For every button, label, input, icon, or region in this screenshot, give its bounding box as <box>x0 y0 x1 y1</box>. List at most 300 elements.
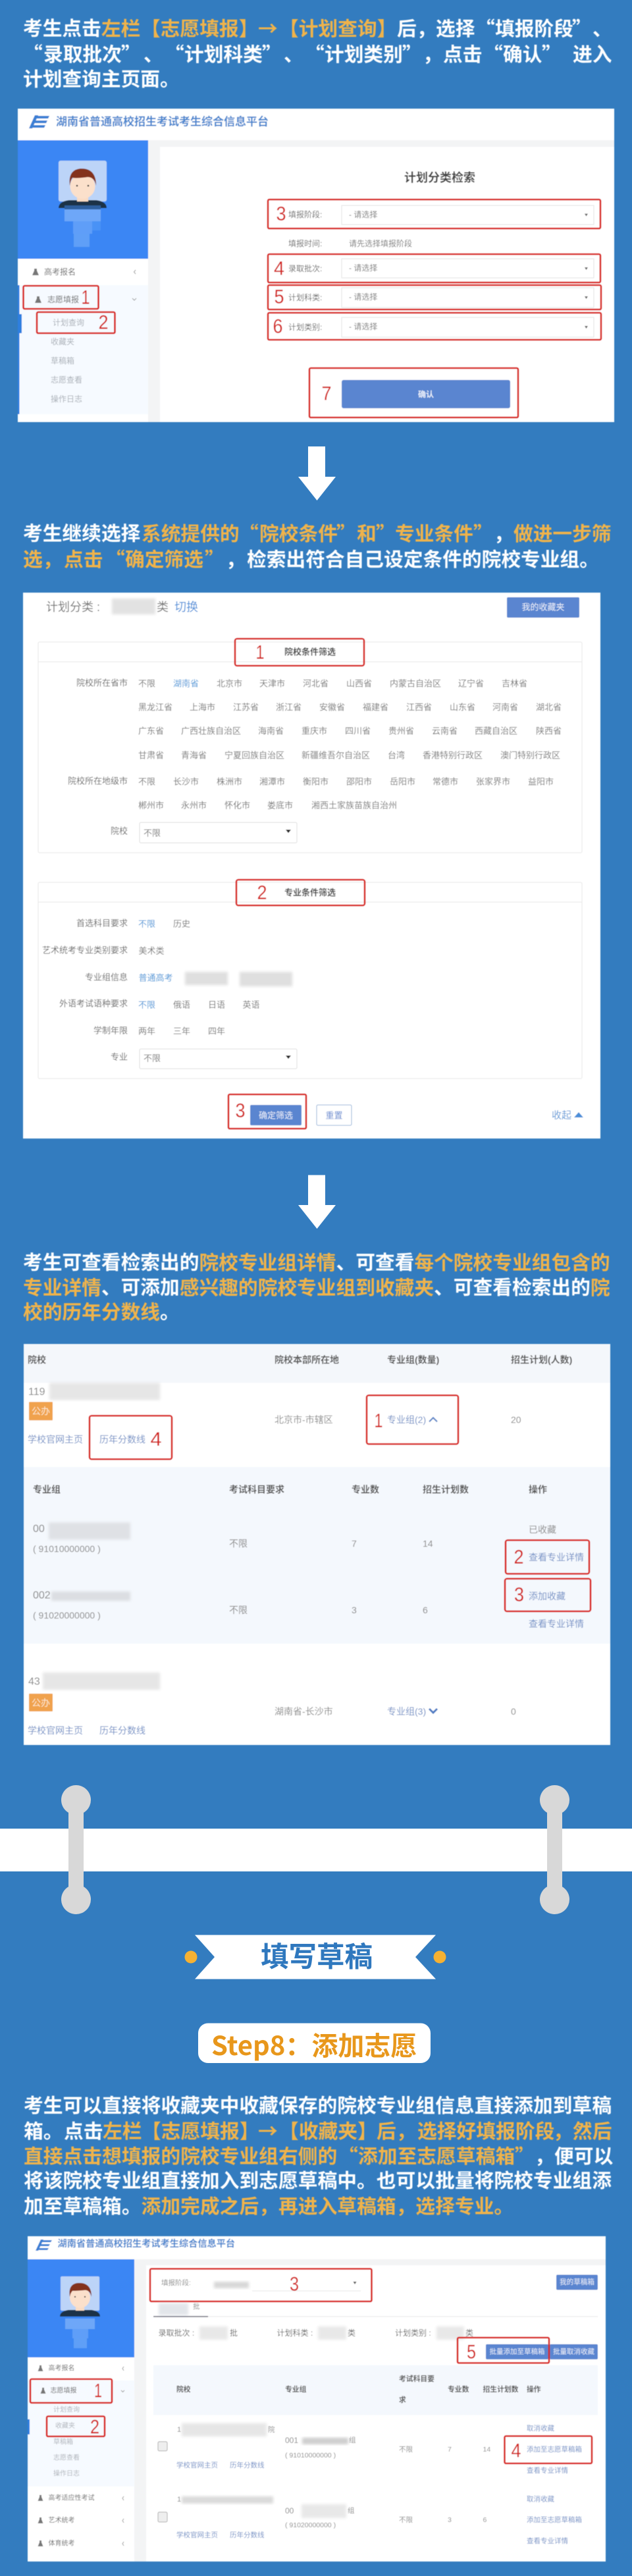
text block: step intro, plan query: 、 <box>144 38 163 67</box>
batch buttons with callout 5: 5 <box>467 2342 476 2363</box>
card: school conditions: 云南省 <box>432 726 458 736</box>
card: major conditions: 专业组信息 <box>85 972 128 982</box>
nested major group table <box>24 1467 610 1644</box>
text block: further filtering: ” <box>336 518 356 547</box>
school row 2: 公办 <box>32 1698 50 1708</box>
card: school conditions: 广东省 <box>138 726 164 736</box>
favorites row 1: 组 <box>349 2436 356 2444</box>
text block: step intro, plan query: ” <box>542 38 562 67</box>
card: school conditions: 1 <box>255 641 265 664</box>
sidebar menu: 高考报名 <box>44 267 76 277</box>
school row 1: 学校官网主页 <box>28 1434 83 1445</box>
sidebar menu: 收藏夹 <box>55 2421 75 2430</box>
reset button <box>317 1105 352 1125</box>
batch buttons with callout 5: 批量添加至草稿箱 <box>490 2347 545 2356</box>
card: school conditions: 院校所在地级市 <box>68 776 128 786</box>
favorites row 1: 4 <box>511 2440 521 2461</box>
card: major conditions: 英语 <box>242 1000 260 1010</box>
card: school conditions: 湖北省 <box>536 702 562 712</box>
text block: add to draft: 点击 <box>64 2115 103 2144</box>
favorites button <box>507 597 579 618</box>
favorites table header: 操作 <box>527 2384 541 2394</box>
section ribbon: fill in draft <box>184 1935 446 1979</box>
collapse link: 收起 <box>552 1110 571 1121</box>
sidebar menu: 志愿查看 <box>53 2454 80 2461</box>
arrow down <box>298 1175 336 1229</box>
text block: step intro, plan query: 考生点击左栏 <box>23 13 140 41</box>
card: school conditions: 广西壮族自治区 <box>181 726 241 736</box>
sidebar menu: 艺术统考 <box>49 2515 75 2525</box>
connector left <box>61 1785 91 1914</box>
school row 2: 历年分数线 <box>99 1725 145 1736</box>
form heading: 计划分类检索 <box>404 171 475 184</box>
table header: 院校 <box>28 1355 46 1365</box>
connector right <box>540 1785 569 1914</box>
school row 2: 43 <box>28 1677 40 1687</box>
favorites row 2: 取消收藏 <box>527 2494 554 2504</box>
text block: add to draft: 后， <box>377 2115 416 2144</box>
text block: further filtering: ” <box>205 544 224 572</box>
field: plan subject select: 计划科类: <box>288 293 322 302</box>
card: school conditions: 常德市 <box>433 777 458 786</box>
text block: step intro, plan query <box>23 13 612 92</box>
nested major group table: 专业数 <box>352 1484 379 1495</box>
card: school conditions: 山西省 <box>346 678 372 689</box>
sidebar menu: 志愿填报 <box>50 2386 76 2394</box>
table header: 专业组(数量) <box>387 1355 439 1365</box>
table header: 院校本部所在地 <box>275 1355 339 1365</box>
field: plan category select: - 请选择 <box>349 322 377 331</box>
tab <box>153 2302 598 2317</box>
text block: step intro, plan query: “ <box>23 38 43 67</box>
sidebar menu: 体育统考 <box>49 2539 75 2547</box>
favorites table header: 院校 <box>176 2384 191 2394</box>
panel: plan classification search screenshot <box>18 109 614 422</box>
card: major conditions: 俄语 <box>173 1000 190 1010</box>
card: school conditions: 湘西土家族苗族自治州 <box>311 801 397 810</box>
school row 2: 湖南省-长沙市 <box>275 1706 333 1717</box>
text block: add to draft: 选择好填报阶段 <box>417 2115 554 2144</box>
panel: favorites screenshot <box>28 2236 606 2562</box>
field: stage select: 3 <box>276 203 286 225</box>
card: school conditions: 澳门特别行政区 <box>500 751 560 760</box>
text block: further filtering: ， <box>494 518 514 547</box>
field: admission batch select: 录取批次: <box>288 263 322 273</box>
text block: results view: 校的历年分数线。 <box>23 1296 180 1325</box>
card: school conditions: 岳阳市 <box>390 777 415 786</box>
field: stage select <box>268 200 600 228</box>
callout 2: favorites item: 2 <box>90 2417 99 2438</box>
confirm button with callout 7: 确认 <box>418 389 434 399</box>
favorites row 1: ( 91010000000 ) <box>285 2452 336 2459</box>
favorites row 1: 查看专业详情 <box>527 2466 568 2475</box>
text block: step intro, plan query: ” <box>572 13 592 41</box>
card: major conditions: 美术类 <box>138 946 165 956</box>
card: school conditions: 院校条件筛选 <box>284 647 336 657</box>
text block: step intro, plan query: ， <box>423 38 442 67</box>
text block: add to draft: 添加至志愿草稿箱 <box>358 2140 515 2169</box>
batch buttons with callout 5 <box>458 2338 598 2363</box>
card: school conditions: 四川省 <box>345 726 371 736</box>
sidebar profile block <box>28 2259 134 2357</box>
school row 1: 北京市-市辖区 <box>275 1414 333 1425</box>
batch info row: 计划科类 : <box>276 2328 313 2338</box>
text block: step intro, plan query: 、 <box>592 13 612 41</box>
school row 1: 20 <box>511 1414 521 1425</box>
card: school conditions: 新疆维吾尔自治区 <box>302 751 370 760</box>
my draft button <box>556 2274 598 2290</box>
favorites row 1: 1 <box>177 2426 181 2434</box>
card: school conditions: 天津市 <box>259 678 285 689</box>
batch buttons with callout 5: 批量取消收藏 <box>553 2347 594 2356</box>
text block: further filtering: 选， <box>23 544 224 572</box>
card: school conditions: 青海省 <box>181 751 207 760</box>
text block: further filtering: ” <box>473 518 493 547</box>
batch info row: 类 <box>348 2328 356 2338</box>
nested major group table: 考试科目要求 <box>229 1484 284 1495</box>
card: major conditions: 不限 <box>138 1000 155 1010</box>
card: school conditions: 辽宁省 <box>458 678 484 689</box>
text block: step intro, plan query: 录取批次 <box>43 38 122 67</box>
batch info row: 类 <box>465 2328 473 2338</box>
text block: further filtering: 点击 <box>64 544 103 572</box>
text block: further filtering: 系统提供的 <box>142 518 240 547</box>
nested major group table: 002 <box>33 1590 51 1601</box>
favorites row 1: 14 <box>483 2446 490 2454</box>
sidebar menu: 计划查询 <box>53 318 84 327</box>
card: school conditions: 西藏自治区 <box>475 726 517 736</box>
nested major group table: ( 91020000000 ) <box>33 1610 101 1621</box>
text block: step intro, plan query: 【计划查询】 <box>279 13 396 41</box>
plan category row: 切换 <box>174 601 198 614</box>
text block: further filtering: 考生继续选择 <box>23 518 140 547</box>
card: major conditions: 外语考试语种要求 <box>59 998 128 1009</box>
card: school conditions: 福建省 <box>363 702 388 712</box>
card: school conditions: 衡阳市 <box>303 777 329 786</box>
card: school conditions: 内蒙古自治区 <box>390 678 441 689</box>
school row 1 <box>28 1383 521 1459</box>
card: school conditions: 郴州市 <box>138 801 164 810</box>
text block: step intro, plan query: 计划查询主页面。 <box>23 63 180 92</box>
favorites table header <box>153 2365 598 2415</box>
callout 3: stage selector <box>150 2269 371 2301</box>
text block: add to draft: ， <box>553 2115 573 2144</box>
sidebar menu: 操作日志 <box>53 2469 80 2477</box>
table header <box>24 1344 610 1383</box>
card: school conditions: 香港特别行政区 <box>423 751 483 760</box>
callout 1: volunteer menu <box>24 286 99 309</box>
card: major conditions: 四年 <box>208 1026 225 1036</box>
school row 1: 1 <box>374 1410 383 1432</box>
favorites row 2: 00 <box>285 2506 294 2515</box>
card: school conditions: 陕西省 <box>536 726 562 736</box>
card: major conditions <box>38 880 582 1079</box>
text block: step intro, plan query: “ <box>475 13 495 41</box>
school row 1: 4 <box>150 1429 162 1450</box>
confirm button with callout 7: 7 <box>321 383 332 404</box>
my draft button: 我的草稿箱 <box>560 2278 594 2286</box>
step heading: Step8：添加志愿 <box>211 2025 417 2063</box>
text block: further filtering: 院校条件 <box>259 518 338 547</box>
batch info row: 录取批次 : <box>158 2328 194 2338</box>
text block: step intro, plan query: → <box>258 13 278 41</box>
favorites row 2 <box>158 2494 582 2545</box>
text block: add to draft: 然后 <box>573 2115 612 2144</box>
card: school conditions: 不限 <box>138 678 155 689</box>
field: fill time: 请先选择填报阶段 <box>349 238 412 248</box>
school row 2: 学校官网主页 <box>28 1725 83 1736</box>
favorites row 1: 7 <box>448 2446 452 2454</box>
card: school conditions: 邵阳市 <box>346 777 372 786</box>
field: plan category select: 计划类别: <box>288 323 322 332</box>
school row 2 <box>28 1673 516 1736</box>
text block: step intro, plan query: “ <box>165 38 184 67</box>
favorites table header: 专业组 <box>285 2384 307 2394</box>
text block: add to draft: 加至草稿箱。添加完成之后，再进入草稿箱，选择专业。 <box>24 2190 514 2219</box>
platform title: 湖南省普通高校招生考试考生综合信息平台 <box>56 115 269 128</box>
text block: step intro, plan query: 确认 <box>503 38 542 67</box>
school row 1: 119 <box>28 1387 45 1397</box>
text block: step intro, plan query: 计划类别 <box>325 38 403 67</box>
sidebar menu: 草稿箱 <box>51 356 74 365</box>
nested major group table: 专业组 <box>33 1484 61 1495</box>
card: major conditions: 三年 <box>173 1026 190 1036</box>
sidebar menu: 草稿箱 <box>53 2438 73 2446</box>
text block: add to draft: ， <box>535 2140 554 2169</box>
card: major conditions: 两年 <box>138 1026 155 1036</box>
plan category row: 计划分类 : <box>46 601 100 614</box>
text block: further filtering: ” <box>376 518 396 547</box>
favorites row 2: 添加至志愿草稿箱 <box>527 2515 582 2524</box>
text block: add to draft: 【收藏夹】 <box>279 2115 377 2144</box>
text block: add to draft: ” <box>515 2140 535 2169</box>
arrow down <box>298 446 336 500</box>
favorites row 1: 不限 <box>399 2446 413 2454</box>
favorites row 1 <box>158 2423 592 2475</box>
text block: further filtering: 确定筛选 <box>125 544 203 572</box>
text block: add to draft: 将该院校专业组直接加入到志愿草稿中。也可以批量将院校专业组添 <box>24 2164 612 2193</box>
text block: add to draft: 左栏 <box>103 2115 142 2144</box>
card: school conditions: 不限 <box>138 777 155 786</box>
sidebar menu: 操作日志 <box>51 394 82 404</box>
favorites row 2: 6 <box>483 2516 487 2524</box>
field: fill time <box>288 238 412 248</box>
card: school conditions: 河南省 <box>492 702 518 712</box>
sidebar menu: 高考适应性考试 <box>49 2493 95 2502</box>
favorites row 2: 组 <box>348 2506 355 2515</box>
nested major group table: 7 <box>352 1538 357 1549</box>
field: stage select: - 请选择 <box>349 210 377 219</box>
field: admission batch select: - 请选择 <box>349 263 377 273</box>
text block: step intro, plan query: 选择 <box>436 13 475 41</box>
card: school conditions: 永州市 <box>181 801 207 810</box>
favorites row 1: 取消收藏 <box>527 2424 554 2432</box>
card: major conditions: 历史 <box>173 919 190 928</box>
school row 1: 专业组(2) <box>387 1414 426 1425</box>
field: plan category select: 6 <box>273 316 283 337</box>
binder band with connectors <box>0 1785 632 1914</box>
text block: further filtering: 检索出符合自己设定条件的院校专业组。 <box>247 544 599 572</box>
card: major conditions: 学制年限 <box>93 1026 128 1035</box>
school row 2: 0 <box>511 1706 516 1717</box>
nested major group table: 招生计划数 <box>423 1484 469 1495</box>
confirm filter button with callout 3 <box>228 1094 306 1129</box>
card: school conditions: 娄底市 <box>267 801 293 810</box>
nested major group table: 查看专业详情 <box>529 1619 584 1629</box>
text block: further filtering: “ <box>105 544 125 572</box>
callout 2: plan query item <box>37 312 115 333</box>
favorites button: 我的收藏夹 <box>521 602 565 612</box>
text block: step intro, plan query: 、 <box>284 38 303 67</box>
card: major conditions: 日语 <box>208 1000 225 1010</box>
card: school conditions: 上海市 <box>190 702 215 712</box>
card: school conditions: 甘肃省 <box>138 751 164 760</box>
panel: results table screenshot <box>24 1344 610 1745</box>
card: school conditions: 浙江省 <box>276 702 302 712</box>
card: major conditions: 2 <box>257 882 267 903</box>
text block: further filtering: 和 <box>357 518 377 547</box>
favorites row 1: 添加至志愿草稿箱 <box>527 2445 582 2454</box>
sidebar menu <box>28 2364 134 2547</box>
favorites row 1: 学校官网主页 <box>176 2461 218 2469</box>
text block: add to draft: 直接点击想填报的院校专业组右侧的 <box>24 2140 535 2169</box>
callout 1: volunteer menu <box>30 2379 112 2403</box>
collapse link <box>552 1110 583 1121</box>
card: school conditions: 不限 <box>144 828 161 838</box>
favorites row 1: 院 <box>268 2425 275 2434</box>
confirm filter button with callout 3: 3 <box>236 1100 245 1122</box>
favorites row 2: 不限 <box>399 2516 413 2524</box>
nested major group table: 3 <box>514 1584 524 1605</box>
card: school conditions: 湘潭市 <box>259 777 285 786</box>
favorites row 2: 1 <box>177 2496 181 2504</box>
text block: results view <box>23 1247 610 1325</box>
callout 2: favorites item <box>47 2417 105 2438</box>
text block: step intro, plan query: 点击 <box>443 38 482 67</box>
sidebar menu: 高考报名 <box>49 2364 75 2372</box>
favorites row 1: 历年分数线 <box>230 2461 265 2469</box>
nested major group table: 14 <box>423 1538 433 1549</box>
section ribbon: fill in draft: 填写草稿 <box>261 1935 373 1975</box>
panel: filter conditions screenshot <box>23 593 600 1139</box>
text block: step intro, plan query: 计划科类 <box>184 38 263 67</box>
card: school conditions: 吉林省 <box>502 678 527 689</box>
field: plan category select <box>268 313 601 340</box>
nested major group table: 已收藏 <box>529 1524 556 1535</box>
icon: platform logo <box>36 2240 52 2251</box>
sidebar profile block <box>18 140 148 259</box>
nested major group table: 查看专业详情 <box>529 1552 584 1563</box>
card: school conditions: 湖南省 <box>173 678 199 689</box>
text block: add to draft: → <box>258 2115 278 2144</box>
card: school conditions: 北京市 <box>217 678 242 689</box>
card: school conditions: 院校 <box>111 826 128 836</box>
tab: 批 <box>193 2302 200 2311</box>
text block: further filtering <box>23 518 612 572</box>
field: fill time: 填报时间: <box>288 238 322 248</box>
nested major group table: 添加收藏 <box>529 1591 566 1601</box>
card: major conditions: 普通高考 <box>138 973 173 982</box>
card: school conditions: 河北省 <box>303 678 329 689</box>
school row 2: 专业组(3) <box>387 1706 426 1717</box>
callout 3: stage selector: 填报阶段: <box>161 2278 191 2287</box>
text block: results view: 专业详情、可添加感兴趣的院校专业组到收藏夹、可查看检索出的院 <box>23 1272 610 1300</box>
text block: further filtering: ， <box>226 544 246 572</box>
card: major conditions: 专业 <box>111 1052 128 1061</box>
card: school conditions: 长沙市 <box>173 777 199 786</box>
text block: add to draft: 箱。 <box>24 2115 63 2144</box>
text block: further filtering: “ <box>239 518 259 547</box>
text block: step intro, plan query: 后， <box>397 13 436 41</box>
sidebar menu <box>18 267 148 414</box>
nested major group table: 00 <box>33 1524 45 1534</box>
callout 1: volunteer menu: 1 <box>94 2380 102 2402</box>
field: admission batch select: 4 <box>274 258 284 279</box>
text block: step intro, plan query: 填报阶段 <box>495 13 573 41</box>
text block: step intro, plan query: 进入 <box>573 38 612 67</box>
sidebar menu: 志愿查看 <box>51 375 82 385</box>
text block: add to draft: “ <box>338 2140 358 2169</box>
card: major conditions: 首选科目要求 <box>76 918 128 928</box>
card: major conditions: 不限 <box>138 919 155 928</box>
card: school conditions: 台湾 <box>388 751 405 760</box>
reset button: 重置 <box>325 1110 343 1121</box>
callout 3: stage selector: 3 <box>290 2273 299 2295</box>
platform title: 湖南省普通高校招生考试考生综合信息平台 <box>58 2238 235 2249</box>
card: school conditions: 江苏省 <box>233 702 259 712</box>
favorites table header: 考试科目要 <box>399 2374 434 2383</box>
favorites row 1: 001 <box>285 2436 298 2445</box>
field: plan subject select: - 请选择 <box>349 292 377 302</box>
school row 1: 历年分数线 <box>99 1434 145 1445</box>
card: school conditions: 海南省 <box>258 726 284 736</box>
favorites row 2: ( 91020000000 ) <box>285 2521 336 2529</box>
text block: step intro, plan query: “ <box>483 38 503 67</box>
sidebar menu: 志愿填报 <box>47 294 79 304</box>
text block: further filtering: 专业条件 <box>395 518 473 547</box>
text block: step intro, plan query: ” <box>262 38 282 67</box>
batch info row: 计划类别 : <box>395 2328 431 2338</box>
plan category row: 类 <box>157 601 169 614</box>
card: school conditions: 宁夏回族自治区 <box>224 751 284 760</box>
sidebar menu: 计划查询 <box>53 2405 80 2414</box>
card: school conditions: 重庆市 <box>302 726 327 736</box>
card: school conditions: 怀化市 <box>224 801 250 810</box>
nested major group table: 不限 <box>229 1605 248 1615</box>
nested major group table: 操作 <box>529 1484 547 1495</box>
text block: add to draft: 【志愿填报】 <box>142 2115 259 2144</box>
nested major group table: 不限 <box>229 1538 248 1549</box>
sidebar menu: 收藏夹 <box>51 337 74 346</box>
favorites row 2: 学校官网主页 <box>176 2531 218 2539</box>
favorites row 2: 历年分数线 <box>230 2531 265 2539</box>
card: school conditions: 山东省 <box>450 702 475 712</box>
card: school conditions: 贵州省 <box>388 726 414 736</box>
nested major group table: 6 <box>423 1605 428 1615</box>
table header: 招生计划(人数) <box>511 1355 572 1365</box>
card: school conditions: 株洲市 <box>217 777 242 786</box>
favorites table header: 招生计划数 <box>483 2384 519 2394</box>
favorites row 2: 3 <box>448 2516 452 2524</box>
text block: add to draft: 便可以 <box>554 2140 614 2169</box>
card: school conditions: 江西省 <box>406 702 432 712</box>
batch info row <box>158 2326 473 2340</box>
confirm filter button with callout 3: 确定筛选 <box>259 1110 293 1121</box>
favorites table header: 专业数 <box>448 2384 469 2394</box>
callout 2: plan query item: 2 <box>99 312 108 333</box>
card: school conditions: 益阳市 <box>528 777 554 786</box>
nested major group table: 3 <box>352 1605 357 1615</box>
